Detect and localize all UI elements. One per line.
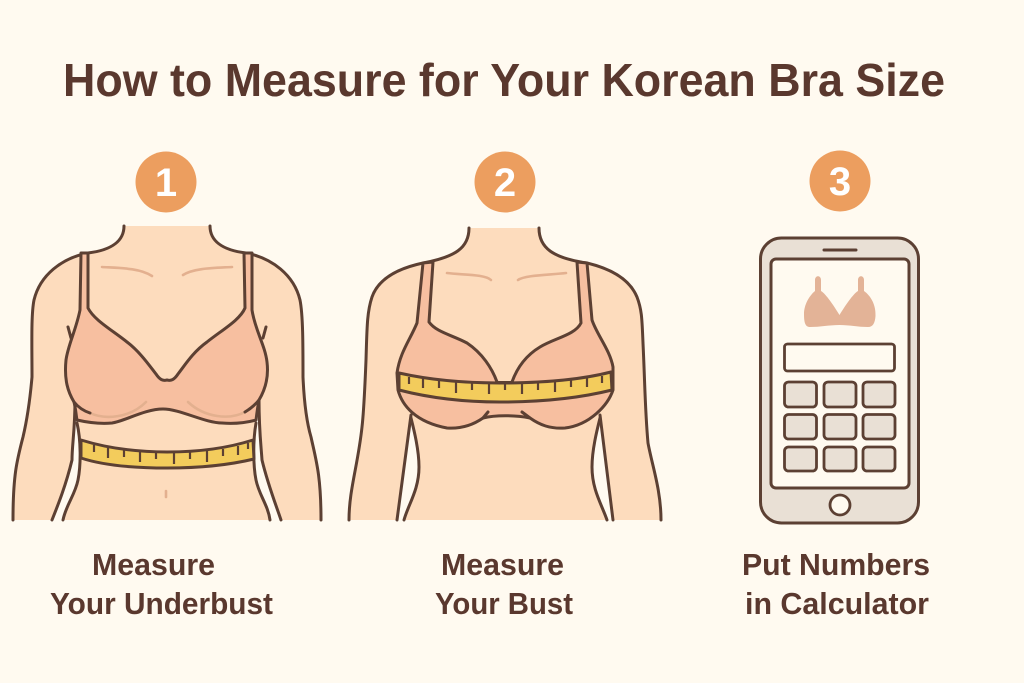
bra cup creases 1 <box>90 402 245 417</box>
measuring tape 1 <box>81 440 254 468</box>
bra 1 <box>65 253 268 423</box>
label: step 1 <box>50 547 273 621</box>
body silhouette 1 <box>13 226 321 520</box>
step 3 badge: 3 <box>829 160 851 204</box>
step 2 badge <box>474 152 536 212</box>
label: step 1: Your Underbust <box>50 586 273 621</box>
step 1 badge <box>136 152 196 212</box>
bra centre creases 2 <box>483 412 530 418</box>
collarbones 2 <box>447 273 566 280</box>
figure 1: underbust measurement <box>13 226 321 520</box>
body outlines 2 <box>349 228 661 520</box>
label: step 2: Measure <box>441 547 564 582</box>
bra 2 <box>397 262 613 428</box>
phone body <box>760 238 918 523</box>
calculator display <box>784 344 894 371</box>
arm gap right <box>254 410 281 520</box>
arm gap left <box>52 410 80 520</box>
calculator keypad <box>784 382 895 471</box>
body silhouette 2 <box>349 228 661 520</box>
figure 2: bust measurement <box>349 228 661 520</box>
home button <box>830 495 850 515</box>
label: step 3: in Calculator <box>745 586 929 621</box>
navel 1 <box>165 491 167 497</box>
body outlines 1 <box>13 226 321 520</box>
label: step 1: Measure <box>92 547 215 582</box>
label: step 3: Put Numbers <box>742 547 930 582</box>
phone screen <box>771 259 909 488</box>
label: step 2: Your Bust <box>435 586 573 621</box>
title: How to Measure for Your Korean Bra Size <box>63 54 945 106</box>
phone calculator icon <box>760 238 918 523</box>
arm gap right 2 <box>592 415 613 520</box>
bridge fill between cups <box>498 372 511 381</box>
label: step 2 <box>435 547 573 621</box>
step 2 badge: 2 <box>494 161 516 205</box>
speaker <box>824 248 856 252</box>
label: step 3 <box>742 547 930 621</box>
step 3 badge <box>810 150 870 212</box>
collarbones 1 <box>102 267 232 276</box>
bra cup underline 1 <box>74 400 259 413</box>
bra icon <box>804 276 876 327</box>
step 1 badge: 1 <box>155 161 177 205</box>
measuring tape 2 <box>399 372 612 402</box>
arm gap left 2 <box>397 415 419 520</box>
